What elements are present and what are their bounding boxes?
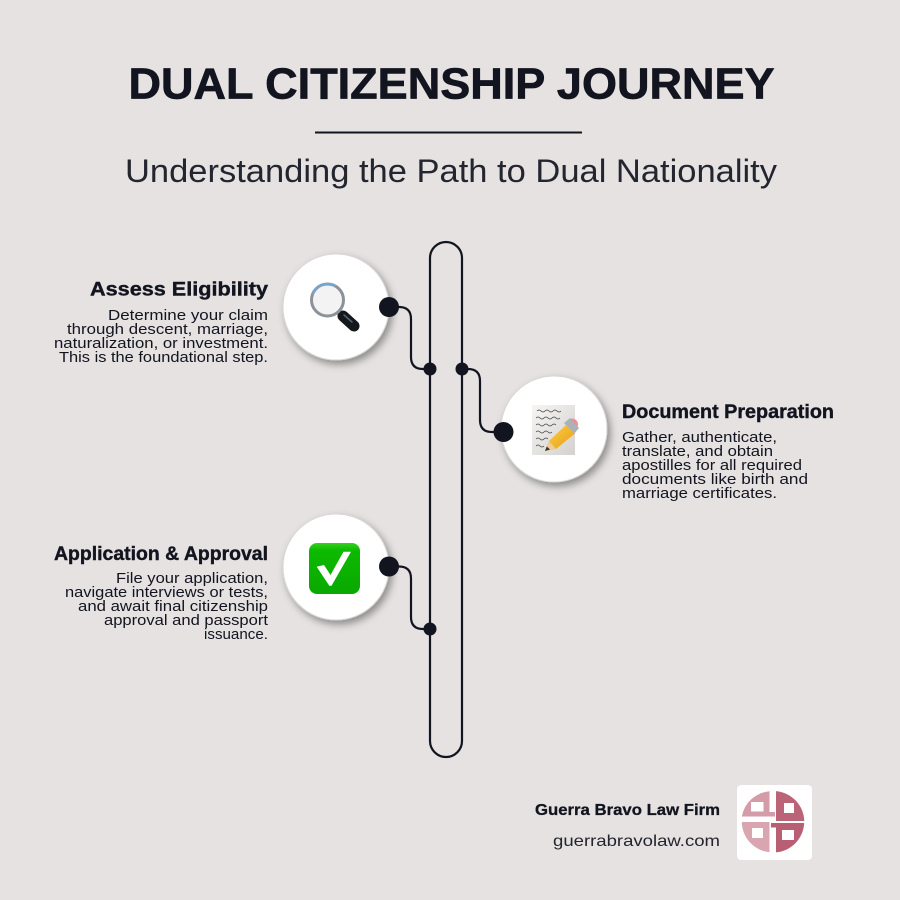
step 3 description (65, 571, 268, 643)
step 2 description (622, 430, 808, 502)
step 2 description: Gather, authenticate, (622, 430, 777, 446)
step 2 description: documents like birth and (622, 472, 808, 488)
step 3 description: issuance. (204, 627, 268, 643)
step 2 icon circle (501, 376, 607, 482)
step 3 description: and await final citizenship (78, 599, 268, 615)
step 1 connector (379, 297, 436, 376)
step 1 description: through descent, marriage, (67, 322, 268, 338)
step 3 description: File your application, (116, 571, 268, 587)
step 1 heading: Assess Eligibility (90, 278, 268, 300)
step 3: application and approval (54, 514, 436, 643)
icon: magnifying glass (312, 284, 354, 326)
icon: memo and pencil (532, 405, 579, 455)
step 2 description: translate, and obtain (622, 444, 773, 460)
step 3 icon circle (283, 514, 389, 620)
step 3 heading: Application & Approval (54, 543, 268, 565)
logo (737, 785, 812, 860)
step 2 connector (456, 362, 514, 442)
footer: firm name: Guerra Bravo Law Firm (535, 802, 720, 819)
subtitle: Understanding the Path to Dual Nationality (125, 153, 777, 189)
icon: green check mark (309, 543, 360, 594)
step 3 description: approval and passport (104, 613, 268, 629)
title: DUAL CITIZENSHIP JOURNEY (128, 60, 774, 108)
step 1 description (54, 308, 268, 366)
footer: website: guerrabravolaw.com (553, 833, 720, 850)
step 3 description: navigate interviews or tests, (65, 585, 268, 601)
step 3 connector (379, 556, 436, 636)
step 1 description: This is the foundational step. (59, 350, 268, 366)
timeline track (430, 242, 462, 757)
step 2 heading: Document Preparation (622, 401, 834, 423)
step 2: document preparation (456, 362, 834, 502)
step 1 description: Determine your claim (108, 308, 268, 324)
step 1: assess eligibility (54, 254, 436, 376)
step 1 description: naturalization, or investment. (54, 336, 268, 352)
step 2 description: apostilles for all required (622, 458, 802, 474)
step 1 icon circle (283, 254, 389, 360)
step 2 description: marriage certificates. (622, 486, 777, 502)
